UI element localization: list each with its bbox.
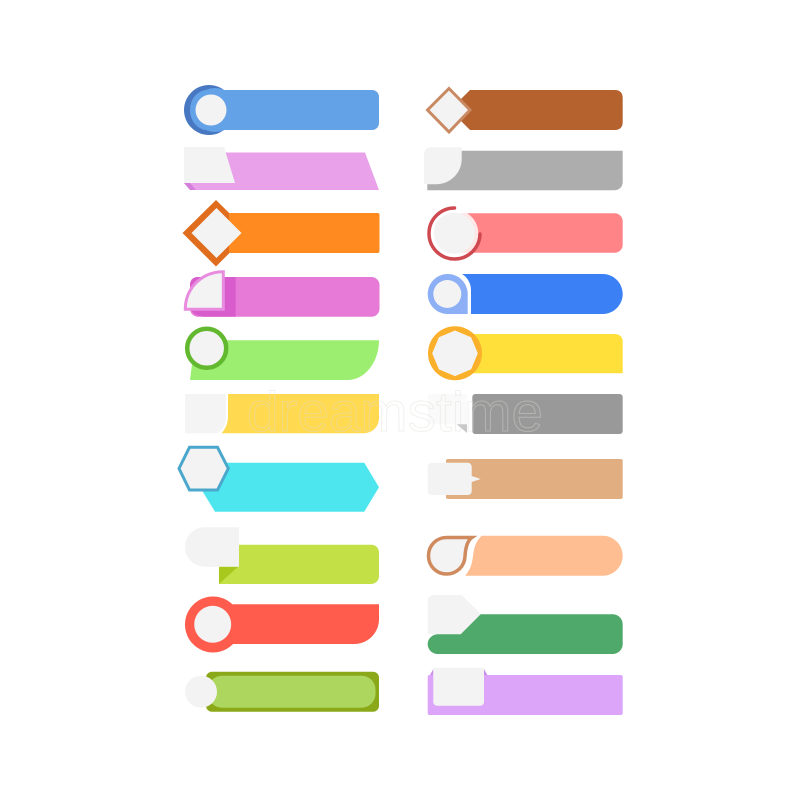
- banner: gray with rounded tab: [424, 147, 623, 190]
- banner: orange with diamond: [182, 200, 380, 266]
- banner: olive with inner pill: [185, 672, 379, 712]
- banner: brown with diamond: [428, 88, 623, 132]
- banner: gray with pale tab: [428, 394, 623, 434]
- banner: green with stepped tab: [428, 595, 623, 654]
- banner: magenta with quarter tab: [185, 272, 380, 317]
- banner: cyan hexagon arrow: [179, 447, 379, 512]
- banner: peach pill with drop: [428, 536, 623, 576]
- banner: lime with folded tab: [185, 527, 379, 584]
- banner: green with ring: [187, 329, 379, 380]
- banner: pink parallelogram with tab: [184, 147, 379, 190]
- banner: purple with pocket tab: [428, 668, 623, 715]
- banner: blue pill with drop: [428, 274, 623, 314]
- banner: yellow with scalloped ring: [428, 326, 623, 380]
- banner: coral with open ring: [429, 208, 623, 259]
- watermark text: dreamstime: [247, 380, 543, 443]
- banner: blue with circle: [184, 85, 379, 135]
- banner: red with ring: [185, 596, 379, 652]
- banner: yellow with white tab: [185, 394, 379, 433]
- banner: tan with speech tab: [428, 459, 623, 499]
